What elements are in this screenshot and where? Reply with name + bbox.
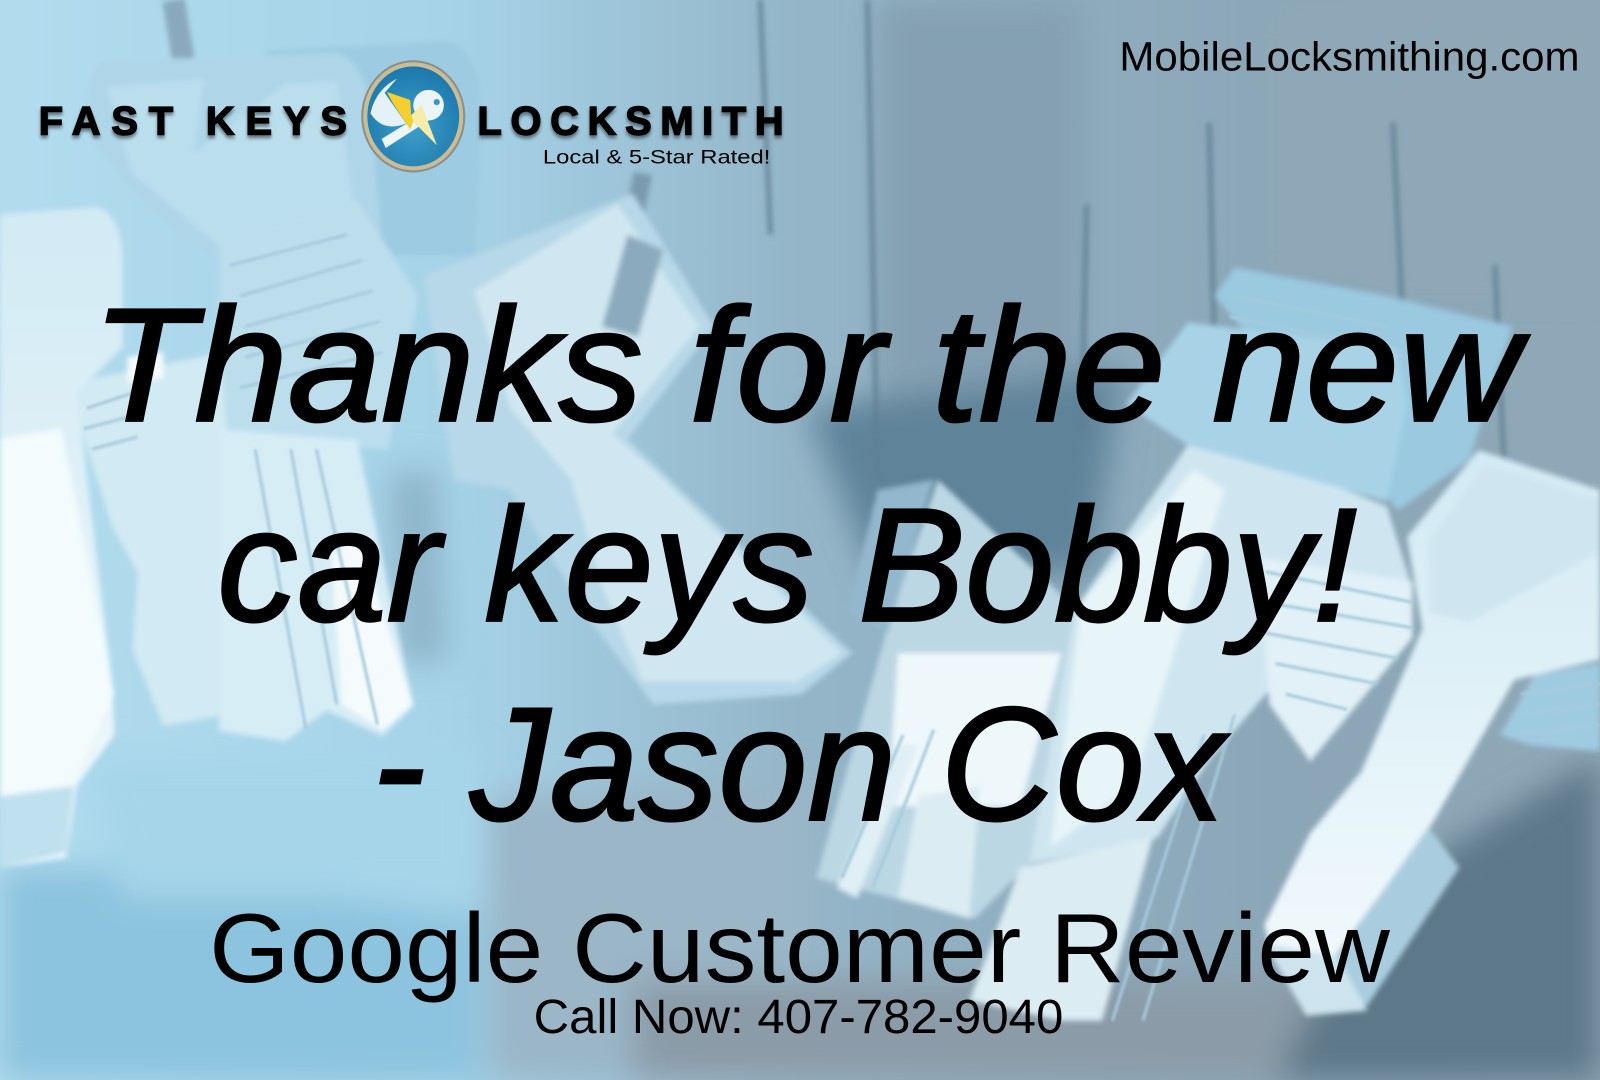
second key body [66,353,230,726]
third key blades [219,430,413,741]
website address: MobileLocksmithing.com [1119,33,1580,79]
source label: Google Customer Review [209,893,1390,1003]
centre-bottom key [816,480,1076,919]
centre key [423,194,852,704]
quote attribution: - Jason Cox [372,675,1230,855]
logo wordmark: LOCKSMITH: LOCKSMITH [478,100,784,144]
quote line 1: Thanks for the new [92,276,1530,456]
hanging wires [173,0,199,153]
quote line 2: car keys Bobby! [217,476,1357,656]
testimonial quote [92,276,1530,855]
logo tagline: Local & 5-Star Rated! [543,146,770,168]
logo emblem: key and lightning bolt [362,61,464,171]
logo: Fast Keys Locksmith [39,61,784,171]
far-left key [0,207,122,868]
right middle key [1214,267,1512,510]
phone call to action: Call Now: 407-782-9040 [534,991,1063,1044]
back key [265,41,482,255]
logo wordmark: FAST KEYS: FAST KEYS [39,100,347,144]
right key [1264,450,1600,955]
key 2 head [86,53,383,267]
key stack under head [219,200,418,449]
